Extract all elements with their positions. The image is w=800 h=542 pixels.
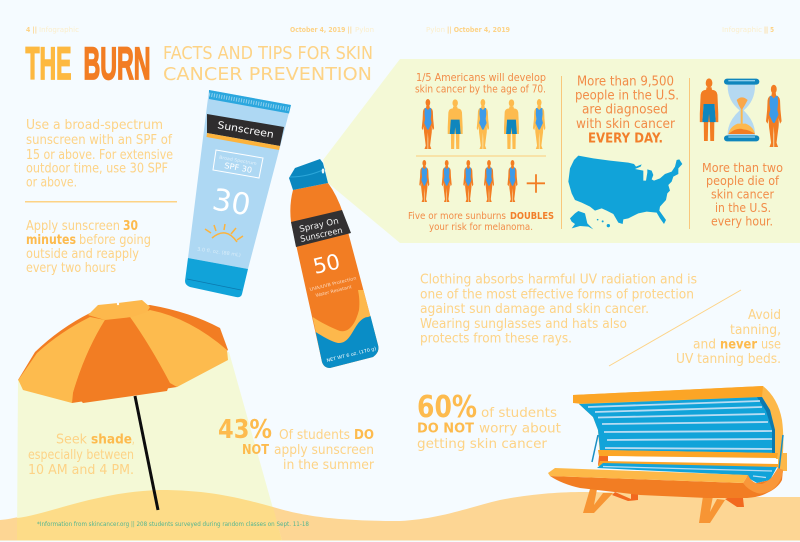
icon: spray-on sunscreen bottle: Water Resistant xyxy=(315,284,353,299)
icon: sunscreen tube: SPF 30 xyxy=(224,161,253,175)
text block: SPF advice: sunscreen with an SPF of xyxy=(26,132,173,148)
text block: avoid tanning: and xyxy=(693,336,716,352)
text block: SPF advice: outdoor time, use 30 SPF xyxy=(26,160,168,176)
text block: seek shade xyxy=(28,432,134,478)
stat: 43 percent: Of students xyxy=(279,427,350,443)
text block: clothing protection: one of the most effective forms of protection xyxy=(420,286,694,302)
panel section: 9,500 diagnosed statistic: people in the U.S. xyxy=(575,88,679,104)
text block: SPF advice: or above. xyxy=(26,174,77,190)
title: THE xyxy=(26,38,72,89)
header: page labels: Infographic xyxy=(39,26,79,34)
icon: spray-on sunscreen bottle: NET WT 6 oz. (170 g) xyxy=(326,346,377,364)
panel section: 9,500 diagnosed statistic: are diagnosed xyxy=(582,102,668,118)
panel section: deaths per hour statistic xyxy=(700,78,783,228)
text block: avoid tanning: use xyxy=(761,336,781,352)
icon: spray-on sunscreen bottle xyxy=(289,159,378,368)
panel section: 9,500 diagnosed statistic: with skin cancer xyxy=(576,117,676,132)
text block: avoid tanning: tanning, xyxy=(730,322,781,338)
stat: 60 percent xyxy=(417,390,561,452)
title: BURN xyxy=(84,38,150,89)
icon: sunscreen tube: 30 xyxy=(210,182,253,223)
text block: avoid tanning: Avoid xyxy=(748,307,781,323)
header: page labels: || October 4, 2019 xyxy=(447,26,510,35)
text block: seek shade: 10 AM and 4 PM. xyxy=(28,462,134,478)
text block: avoid tanning: UV tanning beds. xyxy=(676,351,781,367)
text block: seek shade: Seek xyxy=(56,432,87,448)
header: page labels: Pylon xyxy=(426,26,445,34)
icon: sunscreen tube: 3.0 fl. oz. (88 mL) xyxy=(197,247,241,259)
text block: apply sunscreen: minutes xyxy=(26,232,76,248)
panel section: 9,500 diagnosed statistic: EVERY DAY. xyxy=(588,132,663,146)
stat: 60 percent: DO NOT xyxy=(417,420,475,436)
header: page labels: October 4, 2019 || xyxy=(290,26,352,35)
header: page labels: Pylon xyxy=(355,26,374,34)
icon: spray-on sunscreen bottle: 50 xyxy=(311,249,342,279)
panel section: deaths per hour statistic: skin cancer xyxy=(711,188,774,202)
panel section: deaths per hour statistic: people die of xyxy=(706,174,780,188)
stat: 43 percent: DO xyxy=(354,427,374,443)
sand dune xyxy=(0,490,800,540)
stat: 43 percent: in the summer xyxy=(283,457,374,473)
icon: spray-on sunscreen bottle: Sunscreen xyxy=(299,226,344,245)
text block: seek shade: shade xyxy=(91,432,132,448)
text block: clothing protection: against sun damage and skin cancer. xyxy=(420,301,649,317)
icon: spray-on sunscreen bottle: UVA/UVB Protection xyxy=(309,275,357,293)
header: page labels: Infographic xyxy=(722,26,762,34)
text block: clothing protection: Wearing sunglasses and hats also xyxy=(420,316,627,332)
text block: apply sunscreen: Apply sunscreen xyxy=(26,218,120,234)
icon: tanning bed xyxy=(548,386,787,523)
stat: 43 percent xyxy=(218,415,374,473)
text block: apply sunscreen xyxy=(26,218,151,276)
text block: apply sunscreen: every two hours xyxy=(26,260,116,276)
subtitle: CANCER PREVENTION xyxy=(163,64,372,85)
stat: 60 percent: getting skin cancer xyxy=(417,436,547,452)
panel section: one in five statistic xyxy=(408,72,554,233)
panel: skin cancer statistics spray cone xyxy=(323,59,800,243)
text block: SPF advice xyxy=(26,117,173,190)
stat: 43 percent: 43% xyxy=(218,415,272,445)
panel section: deaths per hour statistic: More than two xyxy=(702,161,783,175)
icon: spray-on sunscreen bottle: Spray On xyxy=(298,217,340,235)
header: page labels: || 5 xyxy=(764,26,774,35)
text block: apply sunscreen: outside and reapply xyxy=(26,246,139,262)
panel section: one in five statistic: skin cancer by the age of 70. xyxy=(415,84,546,96)
panel section: one in five statistic: DOUBLES xyxy=(510,211,554,222)
icon: sunscreen tube xyxy=(185,90,291,297)
text block: apply sunscreen: 30 xyxy=(123,218,138,234)
panel section: one in five statistic: your risk for melanoma. xyxy=(429,222,533,233)
header: page labels xyxy=(26,26,774,35)
panel section: deaths per hour statistic: every hour. xyxy=(711,214,773,228)
subtitle: FACTS AND TIPS FOR SKIN xyxy=(163,43,373,64)
stat: 43 percent: apply sunscreen xyxy=(274,442,374,458)
sand inside the shade beam xyxy=(17,490,282,540)
panel section: one in five statistic: Five or more sunburns xyxy=(408,211,506,222)
icon: sunscreen tube: Sunscreen xyxy=(216,120,275,141)
stat: 60 percent: worry about xyxy=(479,420,561,436)
panel section: 9,500 diagnosed statistic: More than 9,500 xyxy=(577,74,674,90)
text block: avoid tanning: never xyxy=(720,336,757,352)
icon: beach umbrella xyxy=(18,300,228,510)
panel section: one in five statistic: 1/5 Americans will develop xyxy=(416,72,546,84)
text block: seek shade: especially between xyxy=(28,447,134,463)
umbrella shade beam xyxy=(17,352,282,540)
panel section: deaths per hour statistic: in the U.S. xyxy=(715,201,771,215)
text block: clothing protection: Clothing absorbs harmful UV radiation and is xyxy=(420,272,697,288)
header: page labels: 4 || xyxy=(26,26,37,35)
subtitle xyxy=(163,43,373,85)
icon: sunscreen tube: Broad Spectrum xyxy=(219,155,257,167)
icon: map of the United States xyxy=(568,156,682,229)
text block: SPF advice: 15 or above. For extensive xyxy=(26,147,173,163)
text block: seek shade: , xyxy=(132,432,134,448)
footnote: *Information from skincancer.org || 208 students surveyed during random classes on Sept. 11-18 xyxy=(37,521,309,528)
stat: 60 percent: 60% xyxy=(417,390,477,425)
text block: avoid tanning xyxy=(676,307,781,367)
stat: 60 percent: of students xyxy=(481,405,557,421)
panel section: 9,500 diagnosed statistic xyxy=(575,74,679,146)
text block: SPF advice: Use a broad-spectrum xyxy=(26,117,163,133)
stat: 43 percent: NOT xyxy=(242,442,270,458)
text block: apply sunscreen: before going xyxy=(79,232,151,248)
icon: hourglass xyxy=(724,79,759,141)
text block: clothing protection xyxy=(420,272,697,346)
text block: clothing protection: protects from these rays. xyxy=(420,330,572,346)
